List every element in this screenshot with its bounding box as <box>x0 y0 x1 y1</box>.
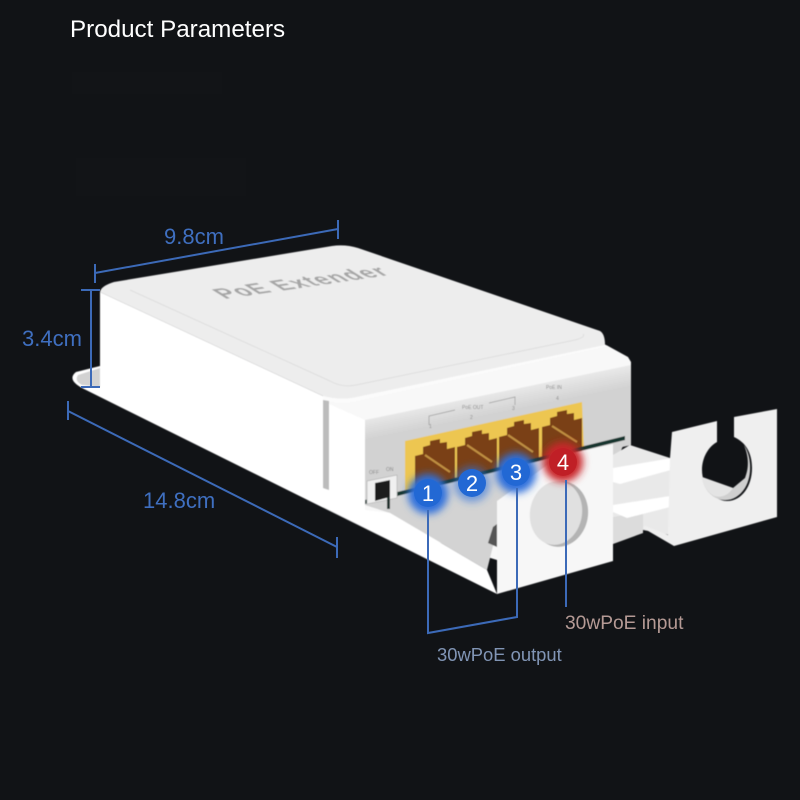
input label: 30wPoE input <box>565 613 684 634</box>
port contacts <box>425 426 577 472</box>
mounting flange shadow <box>77 368 100 387</box>
port labels: 2 <box>470 415 473 421</box>
height dimension <box>81 290 100 387</box>
clip hole shelf <box>702 477 733 497</box>
connector body <box>613 445 670 535</box>
badge 1 <box>414 479 442 507</box>
port labels: PoE OUT <box>462 405 483 411</box>
device top face <box>100 245 605 399</box>
port labels: 1 <box>429 424 432 430</box>
badge 1: 1 <box>422 481 434 506</box>
yellow port block <box>405 402 584 490</box>
left stripe of opening <box>323 400 329 490</box>
tray front white base <box>323 488 497 594</box>
ports <box>415 410 582 489</box>
port labels: PoE IN <box>546 385 562 391</box>
dark strip below ports <box>365 436 625 504</box>
input leader line <box>565 480 567 607</box>
badge 2: 2 <box>466 471 478 496</box>
front body behind panel <box>323 342 631 560</box>
badge glows <box>408 442 583 514</box>
connector lower arm <box>613 496 670 518</box>
power switch: ON <box>386 467 394 473</box>
device left side face <box>72 292 497 594</box>
latch notch <box>488 524 497 547</box>
title: Product Parameters <box>70 16 285 43</box>
top lid inset line <box>130 290 584 386</box>
clip piece with round opening <box>643 409 777 546</box>
length dimension <box>68 401 337 558</box>
cable guard wall with hole <box>497 444 613 594</box>
port labels <box>429 385 562 430</box>
output leader lines <box>428 488 517 633</box>
width label: 9.8cm <box>164 224 224 249</box>
height label: 3.4cm <box>22 326 82 351</box>
port labels: 3 <box>512 406 515 412</box>
power switch: OFF <box>369 470 379 476</box>
badge 2 <box>458 469 486 497</box>
power switch <box>367 467 397 509</box>
length label: 14.8cm <box>143 488 215 513</box>
faint background lettering <box>72 72 246 196</box>
badge 3 <box>502 458 530 486</box>
product name on lid: PoE Extender <box>207 263 397 302</box>
connector lower block <box>613 512 643 544</box>
badge 3: 3 <box>510 460 522 485</box>
port labels: 4 <box>556 396 559 402</box>
badge 4: 4 <box>557 450 569 475</box>
output label: 30wPoE output <box>437 644 562 665</box>
width dimension <box>95 220 338 283</box>
badge 4 <box>549 448 577 476</box>
lid front lip highlight <box>323 345 608 403</box>
clip hole inner surfaces <box>702 445 750 500</box>
front panel <box>365 365 631 505</box>
callout lines <box>428 480 566 633</box>
connector upper arm <box>613 457 678 484</box>
device: PoE extender <box>72 245 777 594</box>
left white block <box>329 404 365 505</box>
tray floor <box>365 441 625 570</box>
